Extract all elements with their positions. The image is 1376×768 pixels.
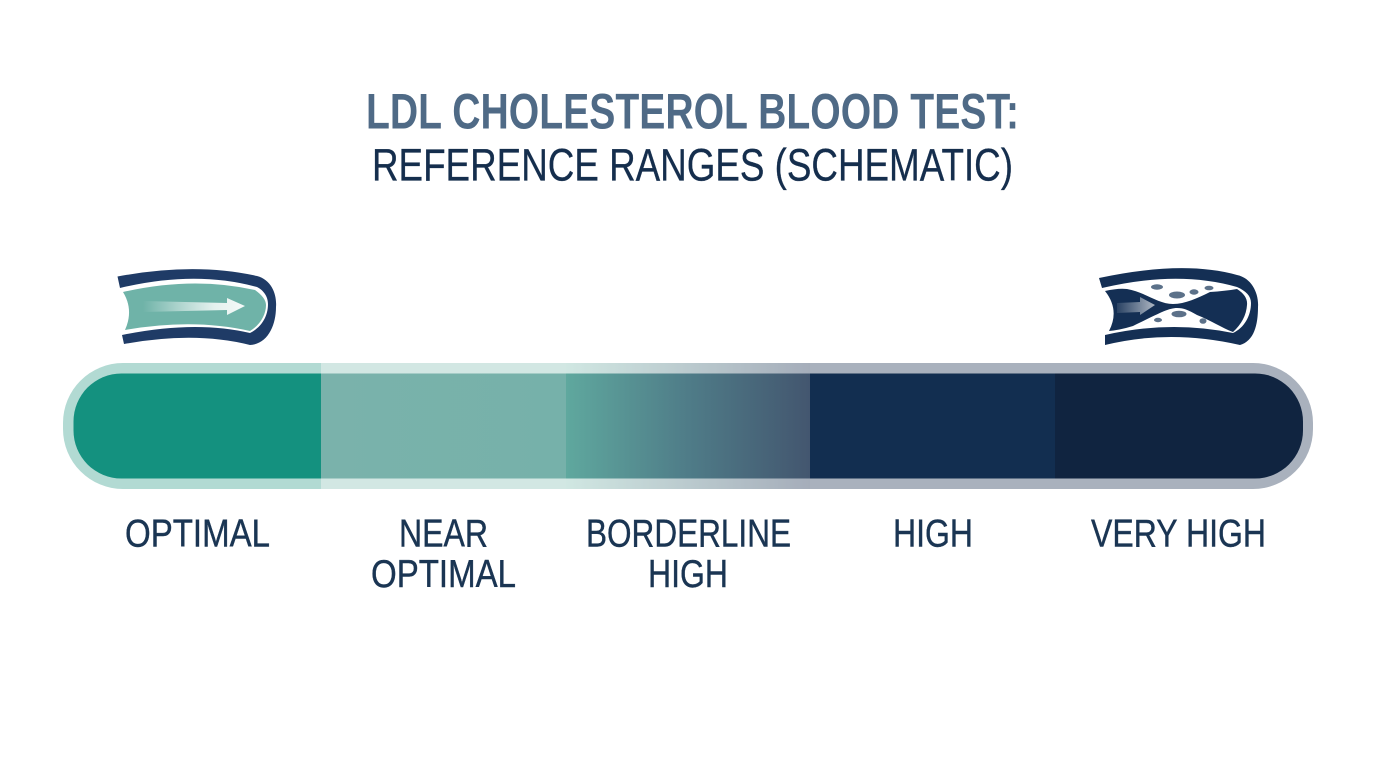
- segment: very high: [1055, 374, 1303, 478]
- bar outer casing: [63, 363, 1313, 489]
- icon: healthy artery with clear flow: [118, 269, 276, 345]
- label: near optimal: NEAR: [399, 512, 488, 556]
- segment: borderline high: [566, 374, 810, 478]
- segment: near optimal: [321, 374, 566, 478]
- label: very high: VERY HIGH: [1091, 512, 1266, 556]
- label: near optimal: [371, 512, 516, 596]
- title line 2: REFERENCE RANGES (SCHEMATIC): [372, 140, 1013, 190]
- range bar: [63, 363, 1313, 489]
- label: high: HIGH: [893, 512, 973, 556]
- label: optimal: OPTIMAL: [125, 512, 270, 556]
- plaque deposits: [1151, 284, 1214, 324]
- title line 1: LDL CHOLESTEROL BLOOD TEST:: [366, 84, 1019, 140]
- label: borderline high: BORDERLINE: [586, 512, 791, 556]
- label: borderline high: HIGH: [648, 553, 728, 596]
- range labels: [125, 512, 1266, 596]
- label: near optimal: OPTIMAL: [371, 553, 516, 596]
- icon: narrowed artery with plaque: [1099, 268, 1258, 345]
- label: borderline high: [586, 512, 791, 596]
- title: [366, 84, 1019, 190]
- segment: high: [810, 374, 1055, 478]
- segment: optimal: [73, 374, 321, 478]
